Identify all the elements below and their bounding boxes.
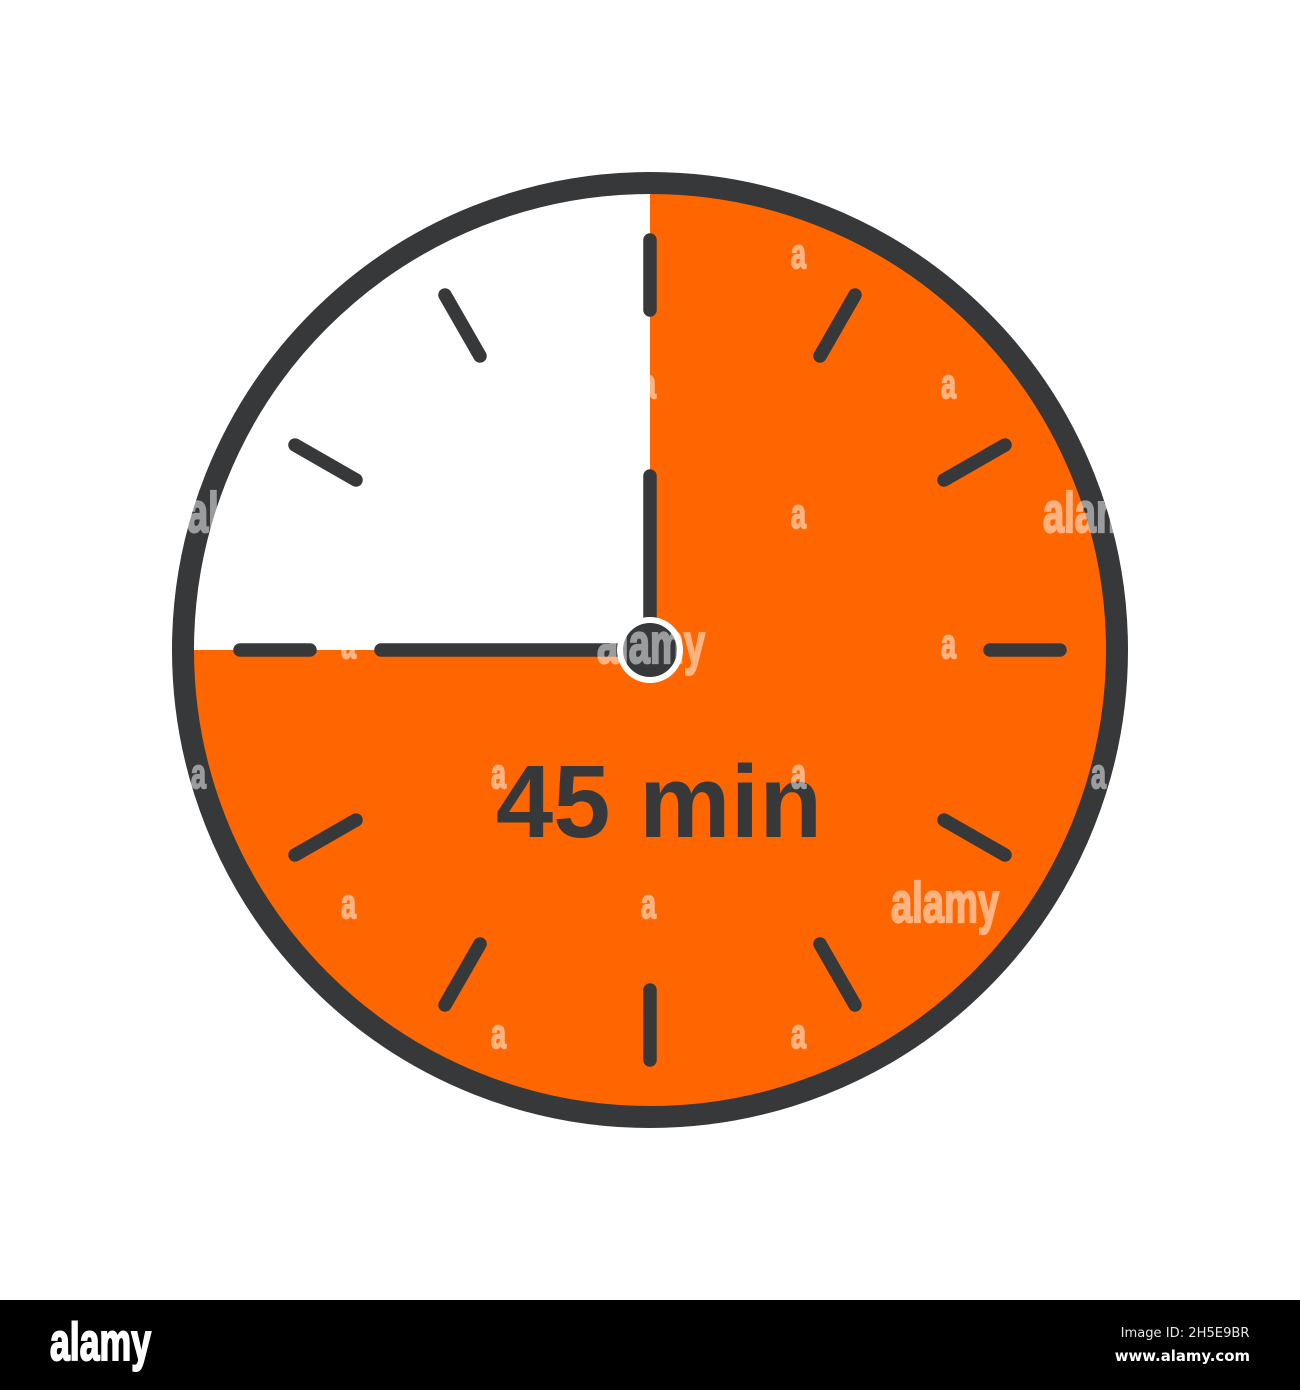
watermarks: a [941,360,956,407]
watermarks: alamy [597,612,705,676]
watermarks: a [1091,750,1106,797]
watermarks [187,230,1151,1057]
watermarks: a [941,620,956,667]
clock hands [381,476,650,650]
tick marks [240,240,1060,1060]
site url: www.alamy.com [1115,1347,1250,1365]
watermarks: a [641,360,656,407]
watermarks: a [791,490,806,537]
clock face [183,183,1117,1117]
watermarks: alamy [1043,481,1151,545]
watermarks: a [341,620,356,667]
watermarks: a [791,230,806,277]
footer logo: alamy [50,1313,151,1372]
image id: Image ID: 2H5E9BR [1121,1326,1250,1341]
watermarks: a [791,750,806,797]
footer bar [0,1300,1300,1390]
watermarks: a [641,880,656,927]
watermarks: a [491,1010,506,1057]
watermarks: alamy [187,481,295,545]
orange 45 minute sector [183,183,1117,1117]
watermarks: a [791,1010,806,1057]
label: 45 min: 45 min [496,744,822,859]
watermarks: a [491,750,506,797]
watermarks: a [341,880,356,927]
watermarks: alamy [891,871,999,935]
clock outer ring [183,183,1117,1117]
watermarks: a [191,750,206,797]
center hub [617,617,683,683]
